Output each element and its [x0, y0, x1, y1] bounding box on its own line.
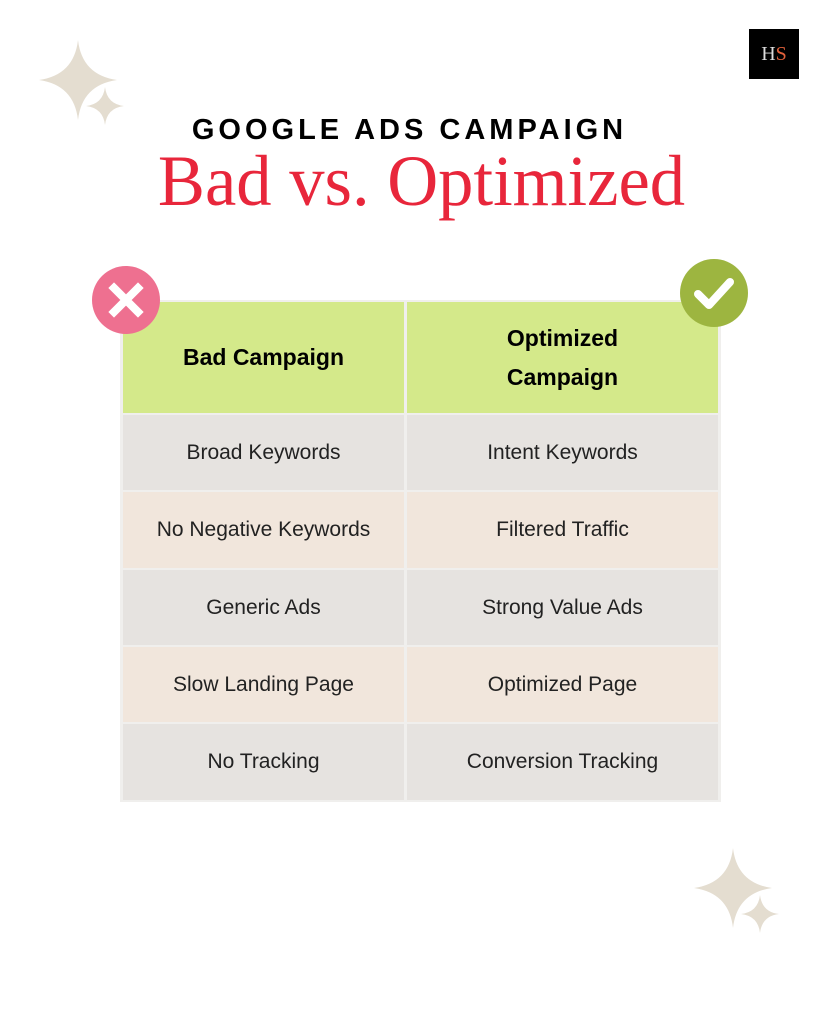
row 3: Generic Ads: [206, 596, 321, 618]
row 2: No Negative Keywords: [157, 518, 370, 541]
row 4: Slow Landing Page: [173, 672, 354, 696]
header: optimized campaign: [407, 302, 718, 413]
sparkles top-left: [40, 40, 124, 124]
header: optimized campaign: Optimized: [507, 324, 618, 350]
icon: X circle: [92, 266, 160, 334]
row 2: [123, 492, 404, 568]
row 5: No Tracking: [207, 750, 320, 773]
logo: H: [761, 42, 776, 64]
table: Strong Value Ads: [482, 596, 643, 618]
subtitle: GOOGLE ADS CAMPAIGN: [192, 114, 627, 146]
icon: check circle: [680, 259, 748, 327]
row 5: [123, 724, 404, 800]
title: Bad vs. Optimized: [158, 141, 685, 221]
row 1: Broad Keywords: [186, 440, 341, 464]
header: optimized campaign: Campaign: [507, 364, 618, 390]
table: Filtered Traffic: [496, 518, 629, 541]
row 1: [123, 415, 404, 490]
sparkles bottom-right: [694, 848, 778, 932]
table: [120, 300, 721, 802]
table: Conversion Tracking: [467, 750, 658, 773]
row 3: [123, 570, 404, 645]
logo: [749, 29, 799, 79]
logo: S: [776, 42, 787, 64]
header: bad campaign: Bad Campaign: [183, 344, 344, 370]
header: bad campaign: [123, 302, 404, 413]
table: Intent Keywords: [487, 440, 638, 464]
row 4: [123, 647, 404, 722]
table: Optimized Page: [488, 672, 637, 696]
